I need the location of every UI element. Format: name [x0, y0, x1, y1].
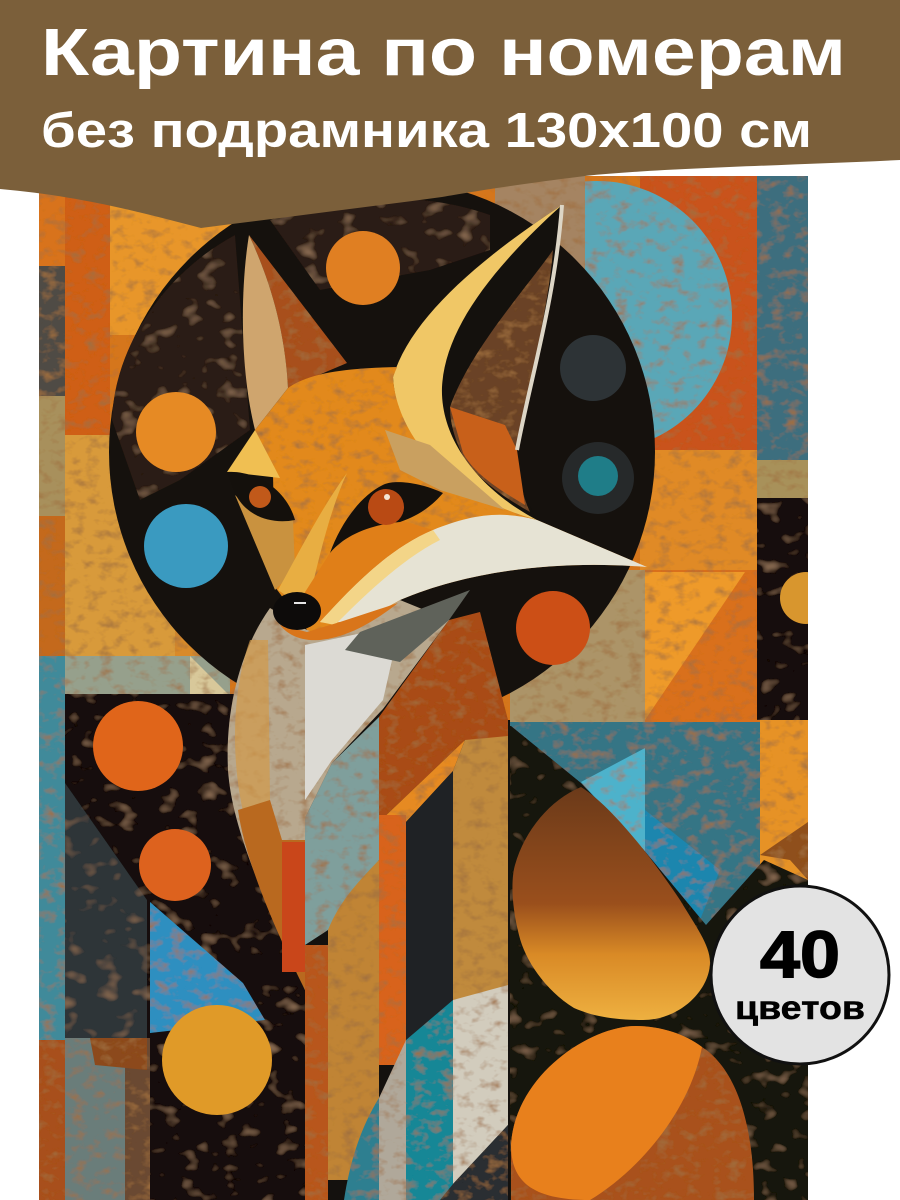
- fox body and chest: [228, 590, 470, 990]
- badge number: 40: [760, 917, 840, 991]
- badge: 40 colours: [711, 886, 889, 1064]
- right ear: [533, 206, 560, 242]
- badge label: цветов: [735, 989, 865, 1026]
- vertical stripes below the fox: [305, 612, 510, 1200]
- painting background panels: [39, 176, 808, 1200]
- banner: brown header ribbon: [0, 0, 900, 228]
- yellow circle lower left: [162, 1005, 272, 1115]
- fox nose: [273, 592, 321, 630]
- blue half circle, upper right: [585, 181, 732, 438]
- left ear: [249, 235, 347, 388]
- fox head: [227, 367, 647, 640]
- blue triangle lower left: [150, 902, 265, 1033]
- small circles and planets: [93, 231, 832, 901]
- dark background regions: [65, 498, 808, 1200]
- lower right shapes: haunch and half-disc: [511, 787, 754, 1200]
- fox eyes: [227, 472, 443, 553]
- subtitle: без подрамника 130х100 см: [41, 104, 812, 158]
- painting: abstract fox: [39, 176, 832, 1200]
- title: Картина по номерам: [41, 15, 846, 90]
- large black circle: [109, 179, 655, 725]
- fox ears: [243, 205, 562, 520]
